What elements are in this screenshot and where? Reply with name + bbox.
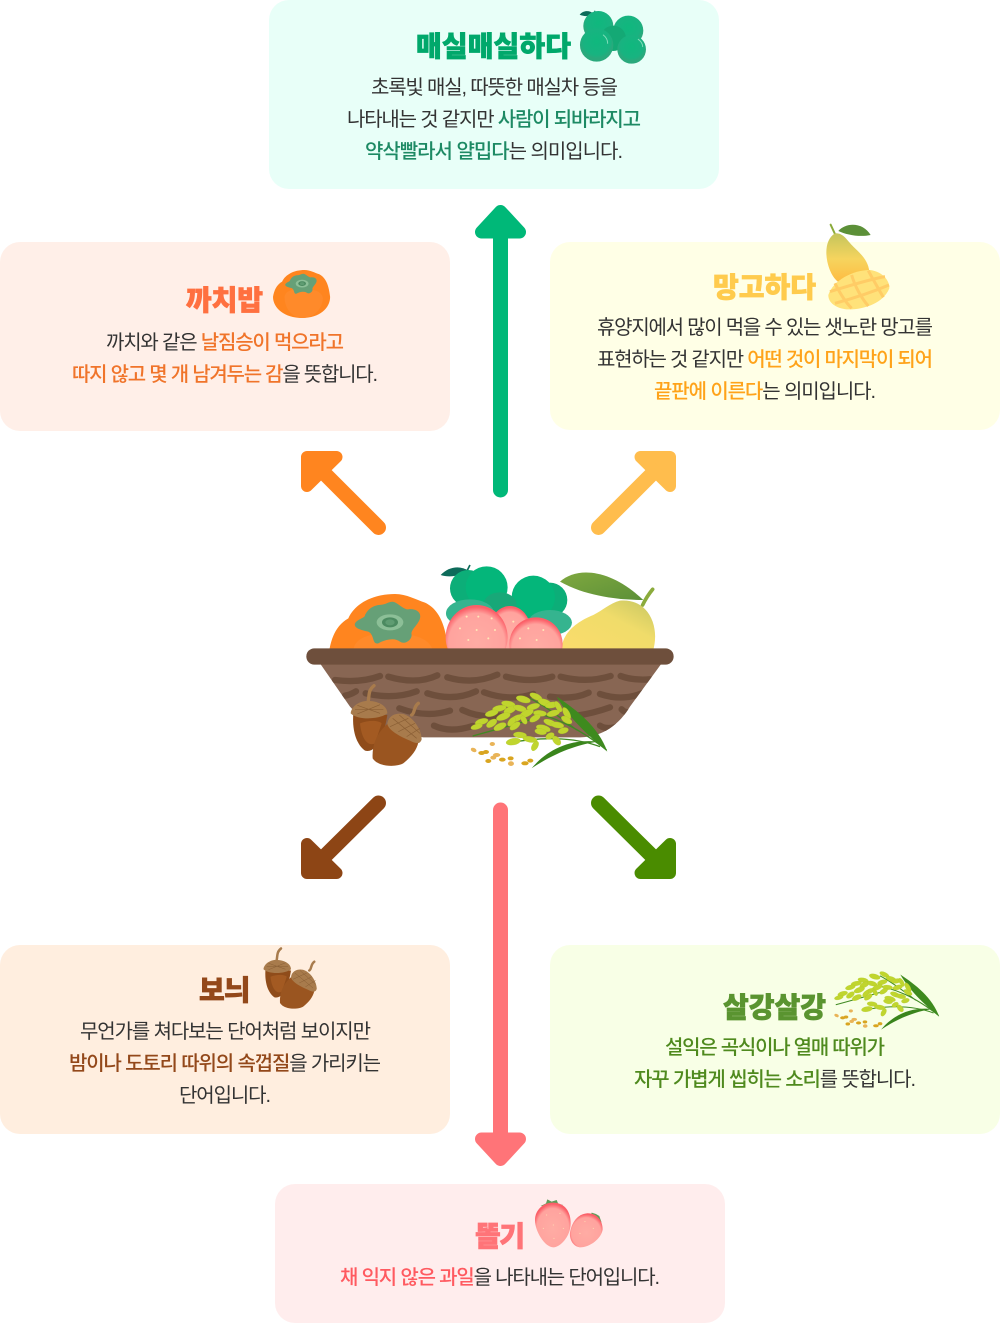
heading: 까치밥: 까치밥: [186, 285, 263, 316]
panel: 매실매실하다: [269, 0, 719, 189]
arrow: to 살강살강: [598, 803, 670, 873]
acorns: [351, 686, 422, 766]
text: 매실 description: 약삭빨라서 얄밉다는 의미입니다.: [365, 140, 623, 163]
text: 살강살강 description: 설익은 곡식이나 열매 따위가: [665, 1036, 885, 1059]
panel: 보늬: [0, 945, 450, 1134]
arrow: to 똘기: [482, 810, 520, 1160]
heading: 살강살강: 살강살강: [723, 992, 826, 1023]
text: 까치밥 description: 따지 않고 몇 개 남겨두는 감을 뜻합니다.: [72, 363, 378, 386]
text: 매실 description: 나타내는 것 같지만 사람이 되바라지고: [347, 108, 641, 131]
heading: 망고하다: 망고하다: [713, 272, 816, 303]
rice: [470, 691, 607, 768]
ume plums: [441, 565, 572, 635]
basket weave: [335, 675, 650, 730]
arrow: to 매실: [482, 212, 520, 490]
text: 똘기 description: 채 익지 않은 과일을 나타내는 단어입니다.: [340, 1266, 660, 1289]
illustration: fruit basket: [306, 565, 674, 768]
text: 보늬 description: 밤이나 도토리 따위의 속껍질을 가리키는: [69, 1052, 381, 1075]
text: 망고 description: 표현하는 것 같지만 어떤 것이 마지막이 되어: [597, 348, 933, 371]
arrow: to 까치밥: [307, 457, 378, 528]
icon: pear and mango: [826, 225, 889, 309]
icon: rice: [834, 970, 939, 1030]
arrow: to 망고: [598, 457, 670, 528]
text: 매실 description: [347, 76, 641, 163]
text: 망고 description: 휴양지에서 많이 먹을 수 있는 샛노란 망고를: [597, 316, 933, 339]
text: 살강살강 description: [634, 1036, 916, 1091]
icon: green plums: [580, 11, 646, 64]
strawberries: [446, 605, 563, 648]
pear and leaf: [560, 573, 655, 650]
heading: 똘기: 똘기: [475, 1221, 525, 1252]
panel: 까치밥: [0, 242, 450, 431]
basket body: [320, 663, 662, 737]
icon: persimmon: [273, 270, 330, 318]
panel: 똘기: [275, 1184, 725, 1323]
text: 까치밥 description: 까치와 같은 날짐승이 먹으라고: [106, 331, 344, 354]
text: 살강살강 description: 자꾸 가볍게 씹히는 소리를 뜻합니다.: [634, 1068, 916, 1091]
text: 보늬 description: 무언가를 쳐다보는 단어처럼 보이지만: [80, 1020, 371, 1043]
heading: 보늬: 보늬: [199, 975, 250, 1006]
arrow: to 보늬: [307, 803, 378, 873]
panel: 망고하다: [550, 225, 1000, 430]
icon: acorns: [264, 948, 317, 1009]
text: 매실 description: 초록빛 매실, 따뜻한 매실차 등을: [371, 76, 618, 99]
icon: strawberries: [535, 1199, 603, 1247]
text: 망고 description: 끝판에 이른다는 의미입니다.: [654, 380, 876, 403]
text: 망고 description: [597, 316, 933, 403]
text: 보늬 description: 단어입니다.: [179, 1084, 271, 1107]
text: 까치밥 description: [72, 331, 378, 386]
persimmon: [330, 594, 448, 648]
text: 보늬 description: [69, 1020, 381, 1107]
panel: 살강살강: [550, 945, 1000, 1134]
basket rim: [306, 648, 674, 665]
heading: 매실매실하다: 매실매실하다: [416, 31, 571, 62]
